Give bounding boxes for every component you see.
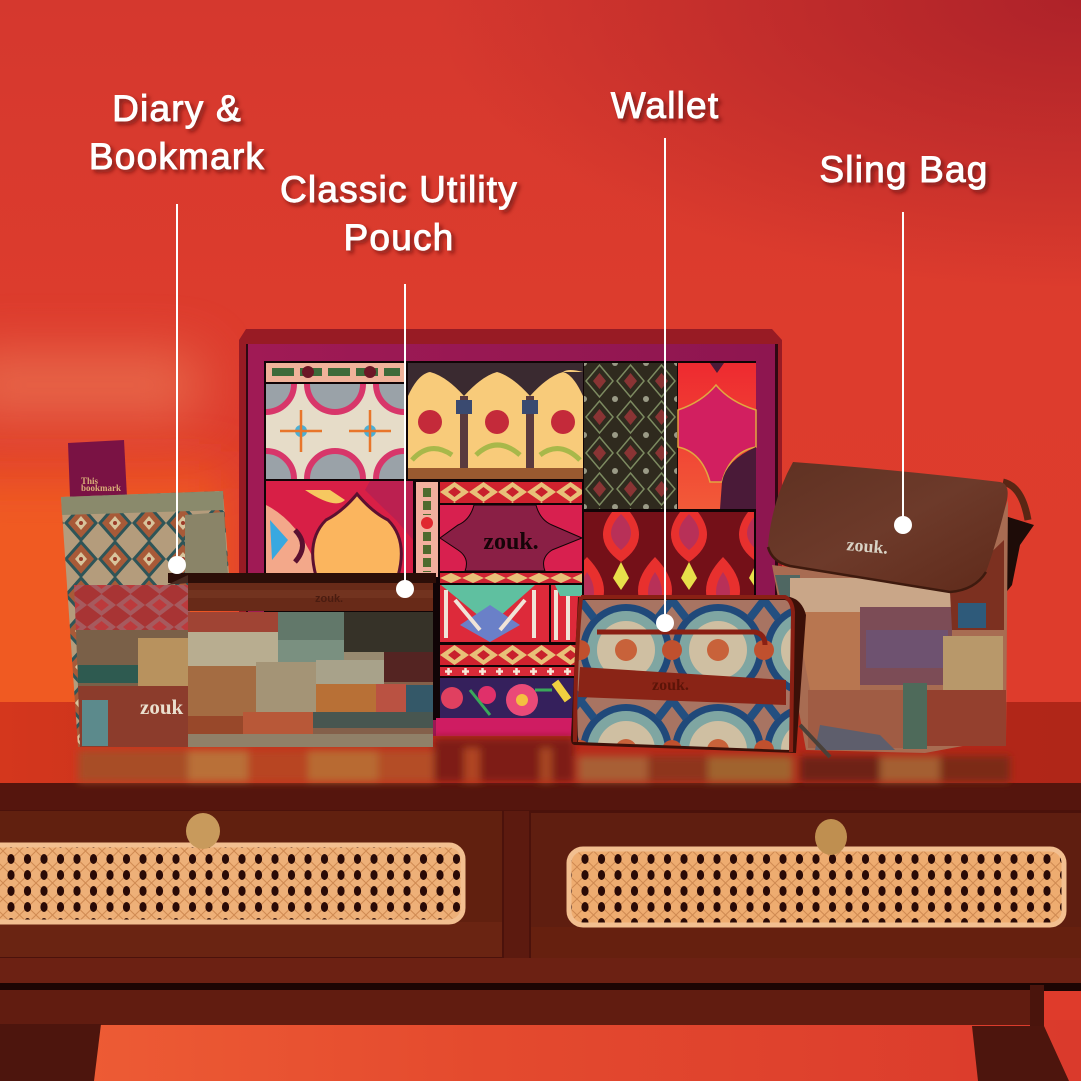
tile: ogee multicolour: [266, 481, 413, 576]
pouch logo: zouk.: [315, 593, 343, 605]
callout: Wallet: Wallet: [611, 85, 719, 126]
center post: [504, 811, 529, 958]
tile: red band: [440, 482, 582, 503]
box base: [436, 718, 582, 736]
left knob: [186, 813, 220, 849]
product: bookmark: [68, 440, 127, 497]
callout: Diary & Bookmark: Bookmark: [89, 136, 265, 177]
tile: yellow arches: [408, 363, 583, 479]
tile: turquoise medallion: [440, 585, 582, 642]
tile: lower band: [440, 645, 582, 665]
tile: pink lattice: [266, 384, 405, 479]
tile: floral band: [266, 363, 405, 382]
tile: ogee red: [678, 363, 756, 509]
table top: [0, 702, 1081, 784]
callout: Diary & Bookmark: Diary &: [112, 88, 242, 129]
callout: Sling Bag: Sling Bag: [819, 149, 989, 190]
table body: [0, 810, 1081, 985]
callout: Diary & Bookmark: [89, 88, 265, 574]
right cane panel: [569, 849, 1064, 925]
table front strip: [0, 783, 1081, 811]
right knob: [815, 819, 847, 855]
product: utility pouch: [167, 573, 436, 747]
left drawer: [0, 811, 502, 957]
tile: cross band: [440, 667, 582, 676]
product: bookmark: This: [81, 476, 99, 486]
callout: Classic Utility Pouch: Pouch: [344, 217, 454, 258]
diary logo: zouk: [140, 695, 184, 719]
callout: Classic Utility Pouch: Classic Utility: [280, 169, 518, 210]
logo text: zouk.: [483, 529, 539, 555]
wallet strap: [578, 667, 786, 705]
tile: navy floral: [440, 678, 582, 718]
callout: Sling Bag: [819, 149, 989, 534]
reflections on table: [78, 738, 1010, 782]
tile: logo plaque: [440, 505, 582, 571]
box lid edge: [239, 329, 782, 736]
product: wallet: [571, 597, 830, 757]
wallet zip: [800, 725, 830, 757]
tile: motif band: [440, 573, 582, 583]
table rail: [0, 958, 1081, 984]
table legs: [0, 1024, 101, 1081]
pouch leather band: [188, 583, 433, 611]
tile: maroon mihrab: [584, 512, 754, 598]
bag strap: [1003, 482, 1028, 520]
bag logo: zouk.: [846, 534, 889, 558]
bag body: [772, 500, 1008, 753]
left cane panel: [0, 845, 463, 922]
right drawer: [531, 813, 1081, 958]
product: bookmark: bookmark: [81, 483, 121, 493]
lower rail: [0, 990, 1040, 1025]
callout: Classic Utility Pouch: [280, 169, 518, 598]
product: sling bag: [768, 462, 1034, 753]
bag flap: [768, 462, 1008, 592]
gift box: [239, 329, 782, 736]
wallet logo: zouk.: [652, 677, 689, 694]
tile: narrow floral: [416, 482, 438, 577]
table: [0, 702, 1081, 1081]
tile: dark geometric: [584, 363, 677, 509]
product: diary: [61, 491, 229, 747]
callout: Wallet: [611, 85, 719, 632]
